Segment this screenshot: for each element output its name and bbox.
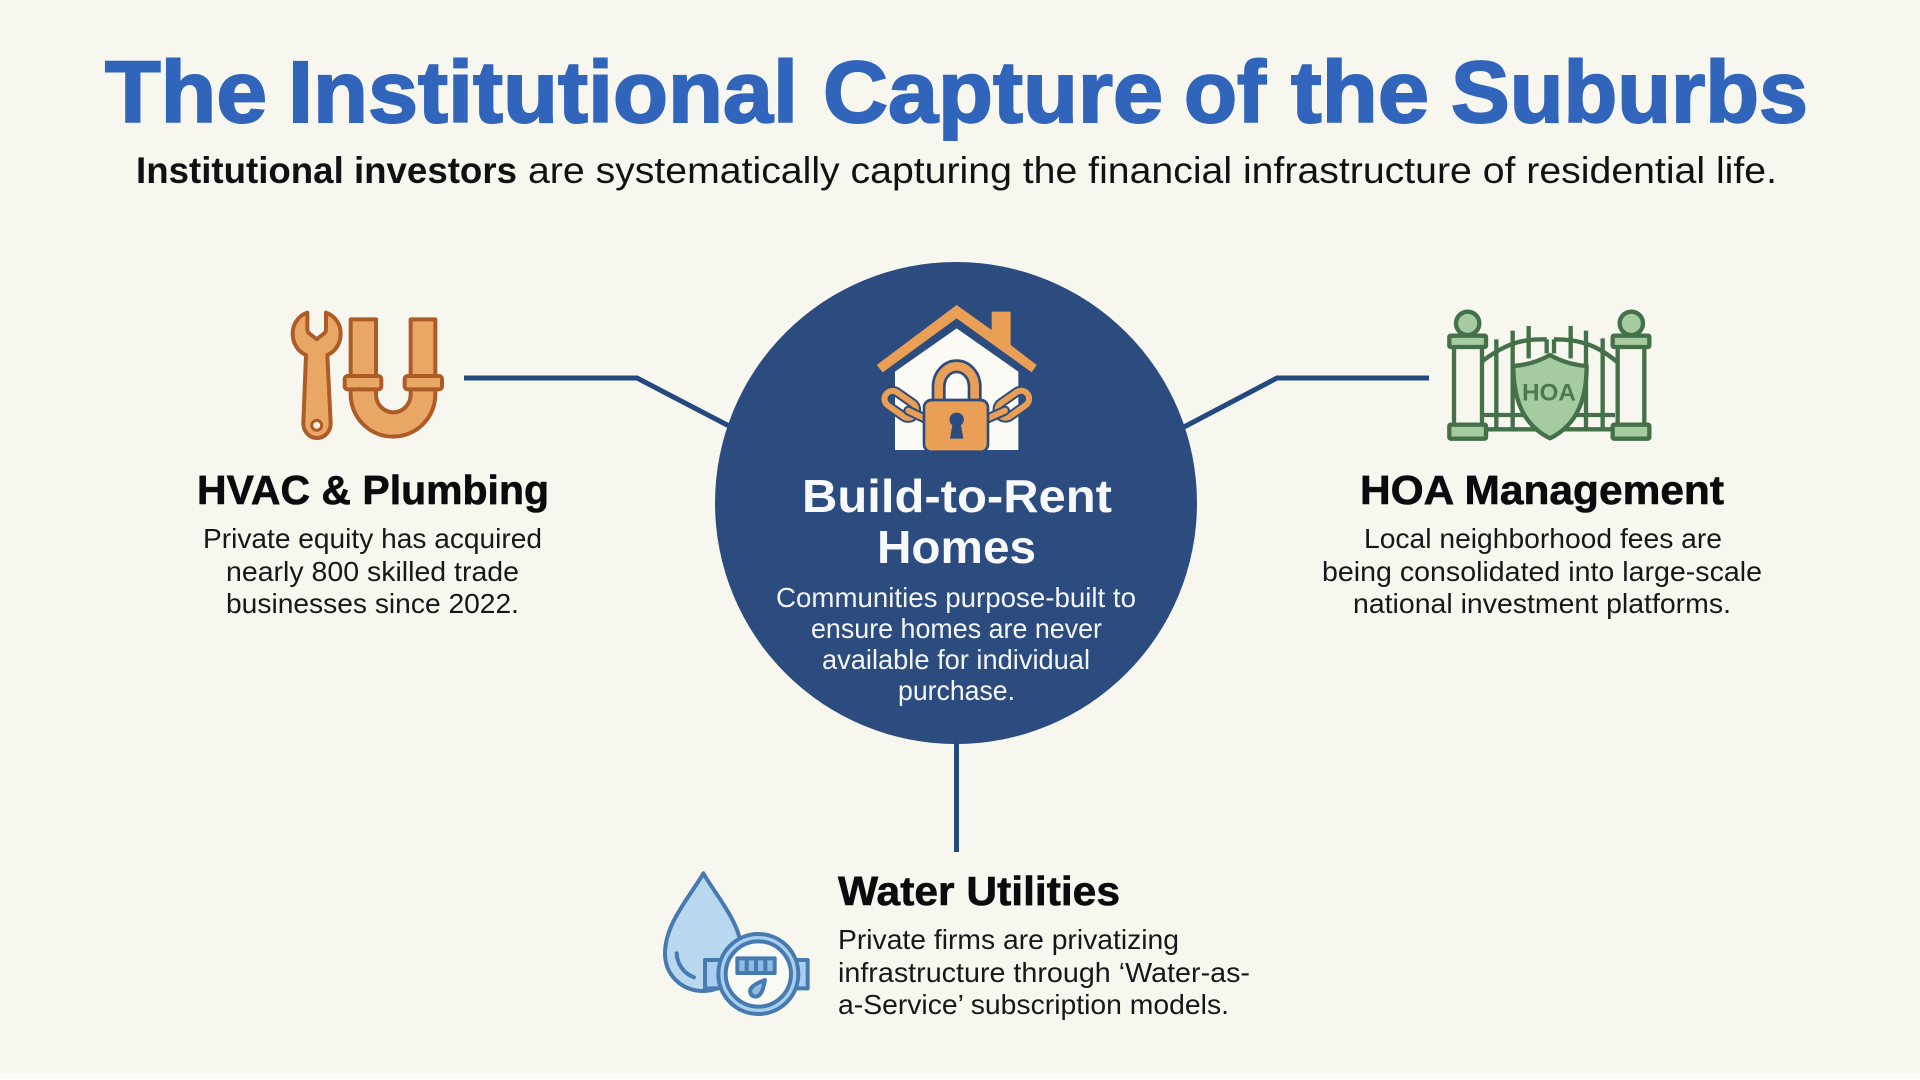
panel: HVAC & Plumbing: [197, 313, 549, 619]
title: Suburbs: [1451, 44, 1808, 141]
text: center description: ensure homes are never: [811, 613, 1102, 644]
text: center description: purchase.: [898, 675, 1015, 706]
title: [105, 44, 1808, 141]
text: center description: Communities purpose-built to: [776, 582, 1136, 613]
title: the: [1291, 44, 1429, 141]
text: HVAC description: Private equity has acquired: [203, 523, 542, 554]
icon: wrench and pipe: [293, 313, 442, 438]
text: HOA description: [1322, 523, 1762, 619]
text: Water description: Private firms are privatizing: [838, 924, 1179, 955]
heading: Build-to-Rent Homes: [802, 470, 1112, 573]
icon: house with padlock and chain: [877, 305, 1037, 452]
connector: HVAC to center: [464, 378, 731, 427]
text: center description: available for individual: [822, 644, 1090, 675]
title: of: [1184, 44, 1267, 141]
text: HOA description: Local neighborhood fees are: [1364, 523, 1722, 554]
heading: HVAC & Plumbing: HVAC & Plumbing: [197, 467, 549, 513]
icon: gate with HOA shield: [1449, 312, 1649, 439]
text: HOA description: being consolidated into large-scale: [1322, 556, 1762, 587]
text: center description: [776, 582, 1136, 706]
icon: gate with HOA shield: HOA: [1522, 380, 1576, 407]
heading: Water Utilities: Water Utilities: [838, 868, 1120, 914]
connector: center to water utilities: [954, 740, 959, 852]
text: HVAC description: [203, 523, 542, 619]
text: HVAC description: nearly 800 skilled trade: [226, 556, 519, 587]
connector: HOA to center: [1184, 378, 1429, 427]
title: Capture: [823, 44, 1163, 141]
heading: Build-to-Rent Homes: Homes: [877, 521, 1036, 573]
title: The: [105, 44, 267, 141]
icon: water drop and meter: [665, 873, 808, 1014]
heading: HOA Management: HOA Management: [1360, 467, 1724, 513]
subtitle: Institutional investors: [136, 150, 517, 191]
panel: Build-to-Rent Homes: [715, 262, 1197, 744]
text: Water description: infrastructure through ‘Water-as-: [838, 957, 1250, 988]
text: HOA description: national investment platforms.: [1353, 588, 1731, 619]
text: Water description: [838, 924, 1250, 1020]
panel: Water Utilities: [665, 868, 1250, 1020]
title: Institutional: [288, 44, 798, 141]
text: Water description: a-Service’ subscription models.: [838, 989, 1229, 1020]
panel: HOA Management: [1322, 312, 1762, 619]
heading: Build-to-Rent Homes: Build-to-Rent: [802, 470, 1112, 522]
text: HVAC description: businesses since 2022.: [226, 588, 519, 619]
subtitle: are systematically capturing the financial infrastructure of residential life.: [528, 150, 1777, 191]
